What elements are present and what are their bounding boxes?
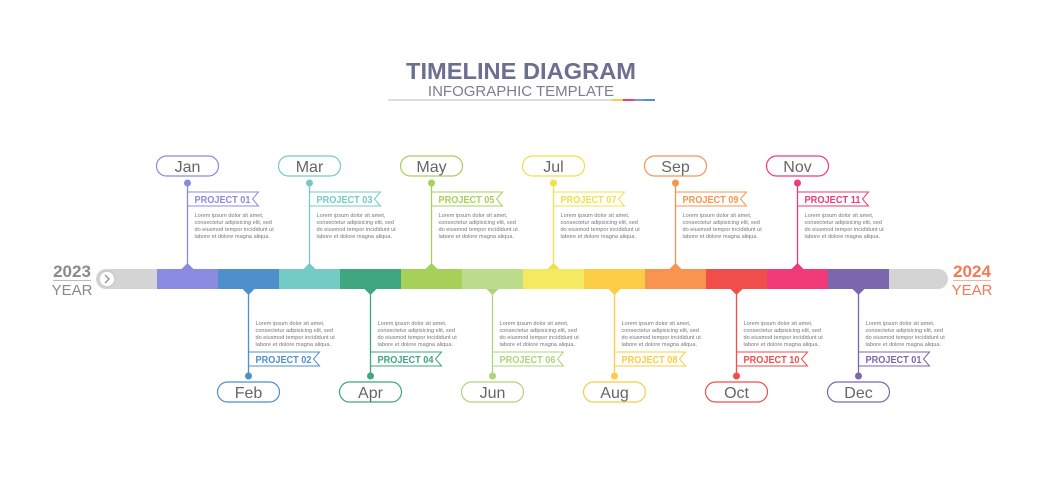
milestone: Oct — [706, 289, 823, 402]
milestone: Dec: consectetur adipisicing elit, sed — [866, 328, 943, 334]
milestone: Sep: consectetur adipisicing elit, sed — [682, 220, 760, 226]
milestone: Dec: labore et dolore magna aliqua. — [866, 342, 942, 348]
milestone: Jan: Lorem ipsum dolor sit amet, — [194, 213, 264, 219]
milestone: Jun: Jun — [480, 385, 505, 402]
milestone: Dec: Dec — [844, 385, 873, 402]
milestone: Jun: labore et dolore magna aliqua. — [500, 342, 576, 348]
milestone: Mar: Mar — [296, 159, 324, 176]
year 2023 label: YEAR — [52, 282, 93, 299]
milestone: Sep: Lorem ipsum dolor sit amet, — [682, 213, 752, 219]
milestone: Jul: do eiusmod tempor incididunt ut — [560, 227, 640, 233]
milestone: May — [400, 156, 518, 269]
milestone: Oct: do eiusmod tempor incididunt ut — [744, 335, 823, 341]
milestone: Mar: consectetur adipisicing elit, sed — [316, 220, 394, 226]
year 2024 label — [952, 262, 993, 299]
milestone: Aug: consectetur adipisicing elit, sed — [622, 328, 699, 334]
milestone: Jul — [522, 156, 640, 269]
milestone: Jul: Lorem ipsum dolor sit amet, — [560, 213, 630, 219]
title — [388, 58, 655, 101]
milestone: Sep: PROJECT 09 — [682, 195, 739, 206]
milestone: May: May — [416, 159, 447, 176]
milestone: Apr: do eiusmod tempor incididunt ut — [378, 335, 457, 341]
milestone: Jun: PROJECT 06 — [500, 355, 556, 366]
timeline bar — [96, 269, 948, 289]
milestone: Sep: do eiusmod tempor incididunt ut — [682, 227, 762, 233]
milestone: Jun: consectetur adipisicing elit, sed — [500, 328, 577, 334]
milestone: Jan: labore et dolore magna aliqua. — [194, 234, 271, 240]
milestone: Dec: Lorem ipsum dolor sit amet, — [866, 321, 935, 327]
milestone: Apr: Lorem ipsum dolor sit amet, — [378, 321, 447, 327]
milestone: Feb — [218, 289, 335, 402]
milestone: May: Lorem ipsum dolor sit amet, — [438, 213, 508, 219]
milestone: Mar — [278, 156, 396, 269]
milestone: Feb: Feb — [235, 385, 262, 402]
year 2024 label: YEAR — [952, 282, 993, 299]
milestone: Nov: Nov — [783, 159, 812, 176]
milestone: Aug: Aug — [600, 385, 629, 402]
milestone: Apr: PROJECT 04 — [378, 355, 434, 366]
milestone: Feb: Lorem ipsum dolor sit amet, — [256, 321, 325, 327]
milestone: Feb: PROJECT 02 — [256, 355, 312, 366]
milestone: Oct: labore et dolore magna aliqua. — [744, 342, 820, 348]
milestone: Oct: consectetur adipisicing elit, sed — [744, 328, 821, 334]
milestone: Apr: Apr — [358, 385, 384, 402]
milestone: Feb: labore et dolore magna aliqua. — [256, 342, 332, 348]
milestone: Aug: Lorem ipsum dolor sit amet, — [622, 321, 691, 327]
milestone: Jul: Jul — [543, 159, 564, 176]
milestone: Oct: PROJECT 10 — [744, 355, 800, 366]
milestone: Nov: PROJECT 11 — [804, 195, 861, 206]
milestone: Dec — [828, 289, 945, 402]
milestone: Jan: PROJECT 01 — [194, 195, 251, 206]
milestone: Apr — [340, 289, 457, 402]
milestone: Sep: labore et dolore magna aliqua. — [682, 234, 759, 240]
milestone: Mar: do eiusmod tempor incididunt ut — [316, 227, 396, 233]
milestone: Aug: do eiusmod tempor incididunt ut — [622, 335, 701, 341]
title: TIMELINE DIAGRAM — [406, 58, 636, 84]
milestone: May: labore et dolore magna aliqua. — [438, 234, 515, 240]
milestone: Jun: Lorem ipsum dolor sit amet, — [500, 321, 569, 327]
year 2023 label — [52, 262, 93, 299]
milestone: Aug: PROJECT 08 — [622, 355, 678, 366]
milestone: Dec: do eiusmod tempor incididunt ut — [866, 335, 945, 341]
milestone: Nov: do eiusmod tempor incididunt ut — [804, 227, 884, 233]
milestone: Jun: do eiusmod tempor incididunt ut — [500, 335, 579, 341]
milestone: May: consectetur adipisicing elit, sed — [438, 220, 516, 226]
milestone: Jul: labore et dolore magna aliqua. — [560, 234, 637, 240]
milestone: Jan — [156, 156, 274, 269]
milestone: Mar: labore et dolore magna aliqua. — [316, 234, 393, 240]
milestone: Sep: Sep — [661, 159, 690, 176]
milestone: Dec: PROJECT 01 — [866, 355, 922, 366]
milestone: Feb: consectetur adipisicing elit, sed — [256, 328, 333, 334]
milestone: Oct: Oct — [724, 385, 750, 402]
title: INFOGRAPHIC TEMPLATE — [428, 83, 614, 100]
milestone: Feb: do eiusmod tempor incididunt ut — [256, 335, 335, 341]
milestone: Nov: consectetur adipisicing elit, sed — [804, 220, 882, 226]
year 2024 label: 2024 — [953, 262, 991, 281]
milestone: Sep — [644, 156, 762, 269]
milestone: Jul: PROJECT 07 — [560, 195, 617, 206]
milestone: Mar: Lorem ipsum dolor sit amet, — [316, 213, 386, 219]
milestone: Jan: consectetur adipisicing elit, sed — [194, 220, 272, 226]
milestone: Jan: do eiusmod tempor incididunt ut — [194, 227, 274, 233]
milestone: Jan: Jan — [175, 159, 200, 176]
milestone: Apr: consectetur adipisicing elit, sed — [378, 328, 455, 334]
milestone: May: do eiusmod tempor incididunt ut — [438, 227, 518, 233]
milestone: Aug — [584, 289, 701, 402]
milestone: Oct: Lorem ipsum dolor sit amet, — [744, 321, 813, 327]
milestone: Apr: labore et dolore magna aliqua. — [378, 342, 454, 348]
year 2023 label: 2023 — [53, 262, 91, 281]
milestone: Nov: Lorem ipsum dolor sit amet, — [804, 213, 874, 219]
milestone: Nov — [766, 156, 884, 269]
milestone: Jul: consectetur adipisicing elit, sed — [560, 220, 638, 226]
milestone: May: PROJECT 05 — [438, 195, 495, 206]
milestone: Jun — [462, 289, 579, 402]
milestone: Nov: labore et dolore magna aliqua. — [804, 234, 881, 240]
milestone: Aug: labore et dolore magna aliqua. — [622, 342, 698, 348]
milestone: Mar: PROJECT 03 — [316, 195, 373, 206]
